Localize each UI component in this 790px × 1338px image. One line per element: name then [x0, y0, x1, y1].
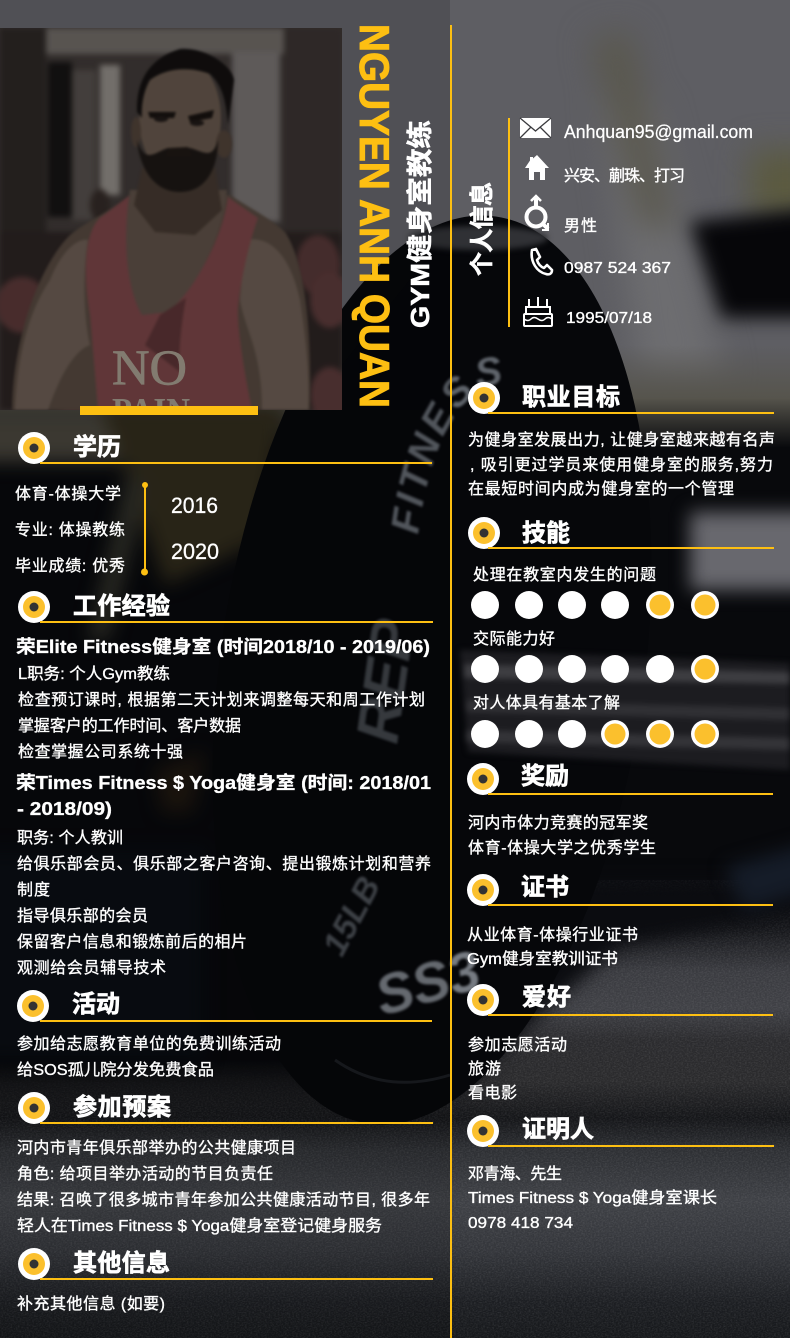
panel: references	[467, 1115, 774, 1232]
hobby list: 参加志愿活动	[468, 1036, 567, 1054]
panel: projects	[17, 1092, 433, 1235]
skill one label: 处理在教室内发生的问题	[473, 566, 656, 584]
heading icon	[18, 1248, 50, 1280]
skill three label: 对人体具有基本了解	[473, 694, 620, 712]
objective text: 在最短时间内成为健身室的一个管理	[468, 480, 734, 498]
job two: 指导俱乐部的会员	[17, 907, 148, 925]
activity list	[17, 1035, 281, 1079]
objective text: 为健身室发展出力, 让健身室越来越有名声	[468, 431, 775, 449]
personal info divider	[508, 118, 510, 327]
job one: L职务: 个人Gym教练	[18, 665, 170, 683]
plate lettering on the barbell weight	[316, 356, 502, 1028]
personal info heading: 个人信息	[469, 182, 496, 276]
years: 2016	[171, 493, 218, 518]
birth date: 1995/07/18	[566, 310, 652, 327]
objective text	[468, 431, 775, 498]
school details: 毕业成绩: 优秀	[15, 557, 125, 575]
school details	[15, 485, 125, 575]
gender: 男性	[564, 217, 597, 235]
job two: 观测给会员辅导技术	[17, 959, 166, 977]
school details: 专业: 体操教练	[15, 521, 125, 539]
certificate list: 从业体育-体操行业证书	[467, 926, 638, 944]
heading: 活动	[72, 991, 120, 1018]
heading icon	[467, 984, 499, 1016]
center divider line	[450, 25, 452, 1338]
hobby list: 看电影	[468, 1084, 517, 1102]
plate lettering on the barbell weight: SS3	[368, 938, 487, 1028]
job two: 制度	[17, 881, 50, 899]
heading rule	[40, 1020, 432, 1022]
job one: 荣Elite Fitness健身室 (时间2018/10 - 2019/06)	[16, 636, 430, 657]
skill two rating	[471, 655, 719, 683]
portrait photo: NO	[112, 339, 187, 395]
panel: awards	[467, 763, 773, 857]
skill one rating	[471, 591, 719, 619]
heading: 参加预案	[73, 1093, 171, 1121]
heading: 爱好	[522, 984, 571, 1011]
email: Anhquan95@gmail.com	[564, 122, 753, 142]
project details: 河内市青年俱乐部举办的公共健康项目	[17, 1139, 296, 1157]
heading icon	[467, 874, 499, 906]
icon: house	[525, 155, 549, 180]
heading icon	[467, 763, 499, 795]
job two: 保留客户信息和锻炼前后的相片	[17, 933, 247, 951]
heading: 证书	[521, 874, 569, 901]
panel: education	[15, 432, 432, 576]
photo accent bar	[80, 406, 258, 415]
floor	[0, 880, 790, 1338]
address: 兴安、蒯珠、打习	[564, 167, 685, 185]
skill three rating	[471, 720, 719, 748]
award list: 体育-体操大学之优秀学生	[468, 839, 656, 857]
heading icon	[468, 382, 500, 414]
heading icon	[18, 432, 50, 464]
panel: work experience	[16, 591, 433, 977]
hobby list: 旅游	[468, 1060, 501, 1078]
heading icon	[18, 1092, 50, 1124]
other details: 补充其他信息 (如要)	[17, 1295, 165, 1313]
award list	[468, 813, 656, 857]
heading: 学历	[73, 434, 121, 461]
reference details: 0978 418 734	[468, 1215, 573, 1232]
certificate list: Gym健身室教训证书	[467, 950, 618, 968]
heading rule	[40, 1278, 433, 1280]
left column shade	[0, 0, 450, 1338]
heading icon	[17, 990, 49, 1022]
heading: 奖励	[521, 763, 569, 790]
job one	[16, 636, 430, 761]
heading icon	[467, 1115, 499, 1147]
name: NGUYEN ANH QUAN	[351, 24, 398, 408]
project details: 角色: 给项目举办活动的节目负责任	[17, 1165, 273, 1183]
job one: 掌握客户的工作时间、客户数据	[18, 717, 241, 735]
job two: 荣Times Fitness $ Yoga健身室 (时间: 2018/01	[16, 772, 431, 793]
panel: skills	[468, 517, 774, 748]
reference details	[468, 1165, 717, 1232]
phone number: 0987 524 367	[564, 260, 671, 277]
job two: 给俱乐部会员、俱乐部之客户咨询、提出锻炼计划和营养	[17, 855, 431, 873]
award list: 河内市体力竞赛的冠军奖	[468, 813, 648, 832]
heading: 工作经验	[73, 592, 170, 620]
heading rule	[488, 1145, 774, 1147]
activity list: 给SOS孤儿院分发免费食品	[17, 1061, 214, 1079]
heading: 其他信息	[73, 1250, 170, 1277]
plate lettering on the barbell weight: FITNESS	[390, 356, 502, 535]
portrait photo: PAIN	[112, 391, 190, 433]
heading rule	[488, 904, 773, 906]
job one: 检查预订课时, 根据第二天计划来调整每天和周工作计划	[18, 691, 425, 709]
icon: envelope	[520, 118, 551, 138]
activity list: 参加给志愿教育单位的免费训练活动	[17, 1035, 281, 1053]
years	[171, 493, 219, 564]
panel: career objective	[468, 382, 775, 498]
school details: 体育-体操大学	[15, 485, 121, 503]
panel: certificates	[467, 874, 773, 968]
heading rule	[40, 462, 432, 464]
plate lettering on the barbell weight: REP	[344, 614, 427, 747]
certificate list	[467, 926, 638, 968]
project details: 轻人在Times Fitness $ Yoga健身室登记健身服务	[17, 1217, 382, 1235]
icon: gender symbol	[526, 196, 548, 230]
panel: other information	[17, 1248, 433, 1313]
project details	[17, 1139, 430, 1235]
heading rule	[40, 1122, 433, 1124]
heading rule	[488, 1014, 773, 1016]
reference details: 邓青海、先生	[468, 1165, 562, 1183]
panel: hobbies	[467, 984, 773, 1102]
skill two label: 交际能力好	[473, 630, 555, 648]
objective text: , 吸引更过学员来使用健身室的服务,努力	[470, 456, 773, 474]
heading rule	[488, 547, 774, 549]
job one: 检查掌握公司系统十强	[18, 743, 183, 761]
project details: 结果: 召唤了很多城市青年参加公共健康活动节目, 很多年	[17, 1191, 430, 1209]
job title: GYM健身室教练	[405, 120, 435, 328]
heading rule	[488, 793, 773, 795]
heading icon	[468, 517, 500, 549]
personal info list	[520, 118, 753, 327]
job two	[16, 772, 431, 977]
heading: 证明人	[522, 1116, 594, 1143]
portrait photo	[0, 28, 350, 433]
reference details: Times Fitness $ Yoga健身室课长	[468, 1189, 717, 1207]
job two: - 2018/09)	[17, 799, 112, 819]
icon: phone	[532, 249, 552, 274]
heading rule	[488, 412, 774, 414]
panel: activities	[17, 990, 432, 1079]
icon: birthday cake	[524, 297, 552, 326]
heading rule	[40, 621, 433, 623]
plate lettering on the barbell weight: 15LB	[316, 871, 388, 962]
heading: 职业目标	[522, 384, 620, 411]
job two: 职务: 个人教训	[17, 829, 123, 847]
timeline	[141, 482, 148, 576]
heading: 技能	[522, 520, 570, 547]
heading icon	[18, 591, 50, 623]
hobby list	[468, 1036, 567, 1102]
years: 2020	[171, 539, 219, 564]
